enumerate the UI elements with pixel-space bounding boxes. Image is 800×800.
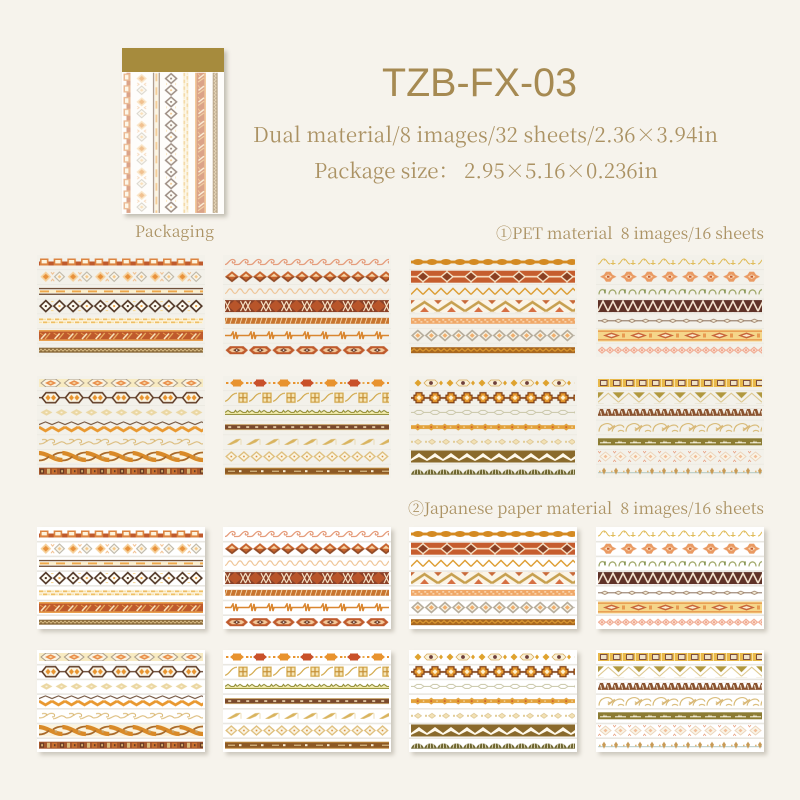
package tape strips xyxy=(124,73,218,213)
Japanese paper sheet 8 xyxy=(596,650,767,755)
Japanese paper sheet 5 xyxy=(37,650,208,755)
specification line: Dual material/8 images/32 sheets/2.36×3.94in xyxy=(253,118,718,148)
package header band xyxy=(122,48,224,72)
Japanese paper sheet 1 xyxy=(37,527,208,632)
PET sheet 5 xyxy=(37,376,205,478)
packaging label: Packaging xyxy=(135,220,214,242)
PET sheet 1 xyxy=(37,255,205,357)
PET sheet 3 xyxy=(409,255,577,357)
PET sheet 8 xyxy=(596,376,764,478)
PET sheet 6 xyxy=(223,376,391,478)
section heading: Japanese paper material: ②Japanese paper material 8 images/16 sheets xyxy=(408,496,764,519)
Japanese paper sheet 2 xyxy=(223,527,394,632)
Japanese paper sheet 6 xyxy=(223,650,394,755)
Japanese paper sheet 4 xyxy=(596,527,767,632)
package body xyxy=(122,48,224,214)
panel: packaging mockup xyxy=(122,48,227,217)
PET sheet 7 xyxy=(409,376,577,478)
package size line: Package size： 2.95×5.16×0.236in xyxy=(314,154,658,184)
package shadow xyxy=(125,51,227,217)
PET sheet 2 xyxy=(223,255,391,357)
Japanese paper sheet 7 xyxy=(409,650,580,755)
title: TZB-FX-03 xyxy=(382,61,577,105)
section heading: PET material: ①PET material 8 images/16 sheets xyxy=(496,221,764,244)
Japanese paper sheet 3 xyxy=(409,527,580,632)
PET sheet 4 xyxy=(596,255,764,357)
